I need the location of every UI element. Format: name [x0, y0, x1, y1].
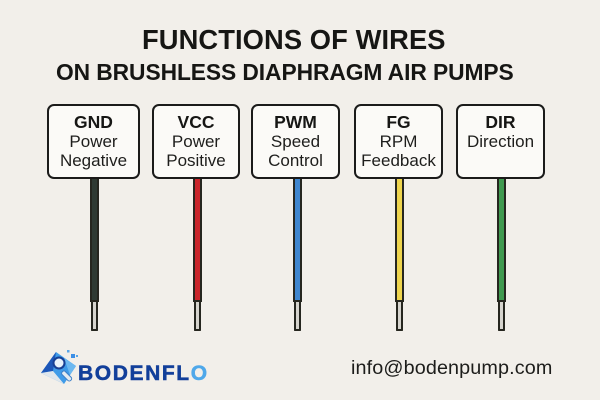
contact email: info@bodenpump.com	[351, 357, 552, 379]
label: VCC: Positive	[166, 151, 226, 170]
label: GND	[47, 104, 140, 179]
label: VCC: VCC	[178, 112, 214, 132]
label: VCC	[152, 104, 240, 179]
label: PWM: Control	[268, 151, 323, 170]
label: GND: GND	[74, 112, 113, 132]
subtitle: ON BRUSHLESS DIAPHRAGM AIR PUMPS	[56, 59, 514, 85]
wire: FG yellow	[395, 179, 404, 331]
label: PWM: PWM	[274, 112, 317, 132]
label: GND: Power	[69, 132, 118, 151]
label: VCC: Power	[172, 132, 220, 151]
wire: VCC red	[193, 179, 202, 331]
wire: PWM blue	[293, 179, 302, 331]
label: DIR: DIR	[485, 112, 516, 132]
logo wordmark: BODENFLO	[78, 362, 209, 384]
title: FUNCTIONS OF WIRES	[142, 24, 446, 55]
label: PWM: Speed	[271, 132, 320, 151]
label: GND: Negative	[60, 151, 127, 170]
label: FG	[354, 104, 443, 179]
label: FG: RPM	[380, 132, 417, 151]
label: PWM	[251, 104, 340, 179]
wire: DIR green	[497, 179, 506, 331]
label: DIR	[456, 104, 545, 179]
wire: GND black	[90, 179, 99, 331]
label: DIR: Direction	[467, 132, 534, 151]
icon: logo mark	[41, 350, 78, 384]
label: FG: FG	[386, 112, 411, 132]
label: FG: Feedback	[361, 151, 436, 170]
